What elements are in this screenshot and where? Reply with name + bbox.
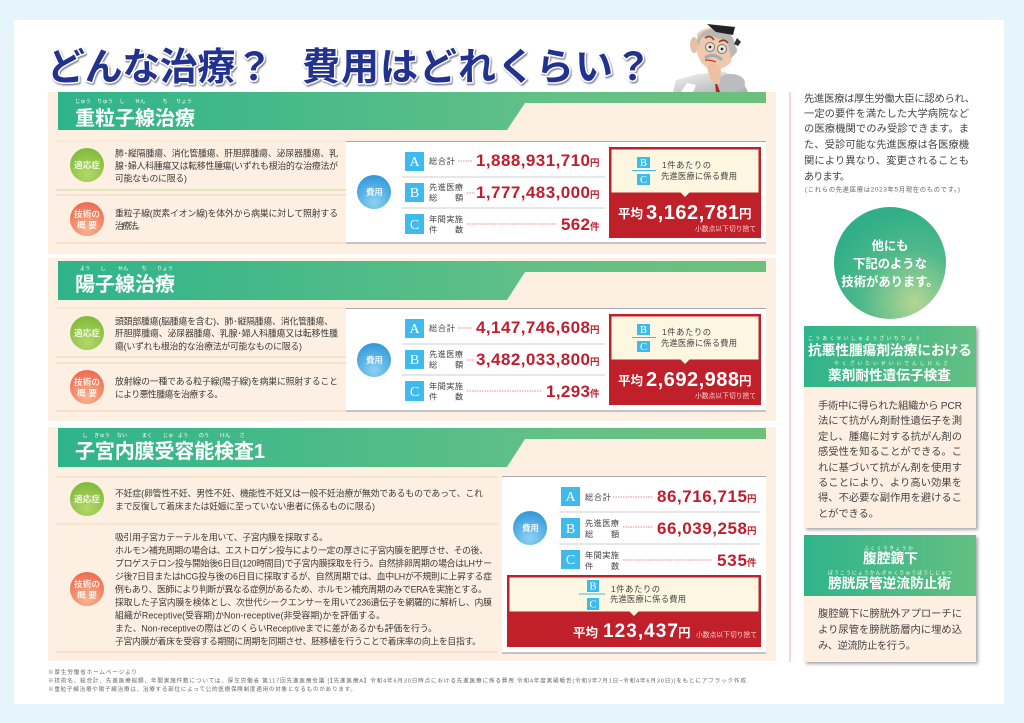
card header: ふくくうきょうか [864, 545, 913, 552]
row B amount: 総 [585, 529, 593, 539]
row C count: 年間実施 [429, 214, 463, 224]
average cost box: 円 [678, 626, 691, 640]
badge: overview: 技術の [74, 208, 100, 219]
badge: indications [70, 482, 104, 516]
average cost box: 3,162,781 [646, 202, 739, 224]
text: overview: 採取した子宮内膜を検体とし、次世代シークエンサーを用いて236遺伝子を網羅的に解析し、内膜 [115, 596, 492, 607]
section header: proton: せん [118, 265, 128, 272]
average cost box: 先進医療に係る費用 [610, 594, 686, 604]
card header: ぼうこうにょうかんぎゃくりゅうぼうしじゅつ [828, 570, 952, 576]
section header: endometrial: 子宮内膜受容能検査1 [75, 440, 265, 463]
card body text: れに基づいて抗がん剤を使用す [818, 461, 962, 474]
section header: endometrial [58, 428, 766, 467]
row B amount: 3,482,033,800 [476, 350, 590, 369]
card header: 抗悪性腫瘍剤治療における [808, 342, 972, 358]
row B amount [561, 518, 757, 539]
row B amount: 円 [590, 190, 600, 201]
row C count: 件 [429, 224, 437, 234]
section header: carbon ion: じゅう [75, 98, 91, 105]
row A total: 円 [747, 494, 757, 505]
average cost box [609, 147, 761, 238]
row A total [405, 151, 600, 171]
section header: carbon ion: りゅう [97, 98, 113, 105]
text: overview: により悪性腫瘍を治療する。 [115, 388, 223, 400]
row A total [561, 487, 757, 506]
average cost box: 1件あたりの [662, 160, 711, 170]
row C count [561, 550, 757, 571]
text: overview [115, 376, 338, 400]
average cost box: 平均 [618, 206, 643, 221]
footnotes: ※技術名、総合計、先進医療総額、年間実施件数については、厚生労働省 第117回先進医療会議 [【先進医療A】令和4年6月30日時点における先進医療に係る費用 令和4年度実績報告(令和3年7月1日~令和4年6月30日)]をもとにアフラック作成 [48, 676, 746, 684]
badge: overview [70, 370, 104, 404]
badge: overview [70, 572, 104, 606]
card header: 腹腔鏡下 [863, 550, 918, 566]
card body text: 感受性を知ることができる。こ [818, 445, 962, 458]
row C count: 数 [611, 561, 619, 571]
row A total: 4,147,746,608 [476, 318, 590, 337]
text: overview [115, 208, 338, 231]
card header [804, 326, 976, 387]
section header: endometrial: よう [178, 432, 188, 439]
text: overview: 子宮内膜が着床を受容する期間に周期を同期させ、胚移植を行うことで着床率の向上を目指す。 [115, 635, 481, 646]
section header: proton: よう [80, 265, 90, 272]
text: overview: 放射線の一種である粒子線(陽子線)を病巣に照射すること [115, 376, 338, 386]
text: indications: 不妊症(卵管性不妊、男性不妊、機能性不妊又は一般不妊治療が無効であるものであって、これ [115, 488, 483, 498]
text: advanced medicine intro: (これらの先進医療は2023年5月現在のものです。) [805, 184, 960, 194]
text: indications: 腺･婦人科腫瘍又は転移性腫瘍(いずれも根治的な治療法が [115, 160, 338, 171]
card body text: み、逆流防止を行う。 [818, 639, 916, 652]
callout: other technologies circle: 下記のような [853, 257, 927, 271]
panel: cost [346, 308, 766, 411]
row C count: C [410, 218, 419, 233]
badge: cost: 費用 [522, 522, 539, 533]
text: overview: プロゲステロン投与開始後6日目(120時間目)で子宮内膜採取を行う。自然排卵周期の場合はLHサー [115, 557, 492, 568]
text: advanced medicine intro: 一定の要件を満たした大学病院など [804, 107, 969, 120]
row C count: C [566, 553, 575, 568]
section header: endometrial: きゅう [94, 432, 110, 439]
text: overview: 重粒子線(炭素イオン線)を体外から病巣に対して照射する [115, 208, 338, 218]
row A total [405, 318, 600, 338]
row A total: A [409, 155, 420, 170]
text: indications: 肺･縦隔腫瘍、消化管腫瘍、肝胆膵腫瘍、泌尿器腫瘍、乳 [115, 148, 338, 158]
text: overview: 組織がReceptive(受容期)かNon-receptive(非受容期)かを評価する。 [115, 609, 385, 620]
badge: overview: 概 要 [77, 387, 97, 398]
average cost box: 2,692,988 [646, 369, 739, 391]
row C count: 年間実施 [585, 550, 619, 560]
row B amount: 66,039,258 [657, 519, 747, 538]
average cost box: 1件あたりの [662, 327, 711, 337]
panel: drug resistance gene test card [804, 326, 976, 528]
badge: indications: 適応症 [74, 159, 100, 170]
section header: proton: りょう [157, 265, 173, 272]
section header: carbon ion: せん [135, 98, 145, 105]
row C count: 件 [429, 392, 437, 402]
text: overview: ジ後7日目またはhCG投与後の6日目に採取するが、自然周期では、血中LHが不規則に上昇する症 [115, 570, 492, 581]
row B amount: 総 [429, 192, 437, 202]
card body text: 定し、腫瘍に対する抗がん剤の [818, 430, 962, 443]
title: 費用はどれくらい？ [302, 47, 652, 89]
card header [804, 535, 976, 596]
row B amount: B [566, 522, 575, 537]
callout: other technologies circle: 他にも [872, 238, 908, 253]
card body text: 得、不必要な副作用を避けるこ [818, 491, 962, 504]
text: advanced medicine intro: あります。 [804, 171, 850, 183]
text: overview [115, 531, 492, 646]
badge: overview: 概 要 [77, 219, 97, 230]
panel: proton carbon-ion therapy section [48, 92, 776, 254]
title: どんな治療？ [47, 47, 273, 89]
callout: other technologies circle: 技術があります。 [841, 274, 939, 289]
row C count: 件 [590, 221, 600, 233]
section header: endometrial: し [82, 432, 88, 439]
row C count [405, 381, 600, 402]
badge: overview [70, 202, 104, 236]
row A total: 円 [590, 325, 600, 336]
section header: endometrial: ない [117, 432, 127, 439]
footnotes: ※重粒子線治療や陽子線治療は、治療する部位によって公的医療保険制度適用の対象となるものがあります。 [48, 685, 356, 693]
section header: carbon ion [58, 92, 766, 130]
badge: cost [357, 343, 391, 377]
card body text: とができる。 [818, 507, 879, 520]
section header: endometrial: のう [199, 432, 209, 439]
row B amount: 先進医療 [429, 349, 463, 359]
text: indications [115, 488, 483, 512]
row A total: 総合計 [429, 156, 455, 166]
panel: cost [502, 476, 766, 653]
text: overview: 例もあり、医師により判断が異なる症例があるため、ホルモン補充周期のみでERAを実施とする。 [115, 583, 487, 594]
section header: carbon ion: し [119, 98, 125, 105]
text: indications: まで反復して着床または妊娠に至っていない患者に係るものに限る) [115, 500, 375, 512]
text: indications: 頭頚部腫瘍(脳腫瘍を含む)、肺･縦隔腫瘍、消化管腫瘍、 [115, 316, 333, 326]
card body text: ることにより、より高い効果を [818, 476, 962, 489]
text: indications: 可能なものに限る) [115, 172, 187, 184]
badge: cost: 費用 [366, 354, 383, 365]
row B amount: B [410, 186, 419, 201]
card header: 膀胱尿管逆流防止術 [828, 575, 951, 591]
section header: proton [58, 261, 766, 300]
badge: indications: 適応症 [74, 327, 100, 338]
badge: indications [70, 148, 104, 182]
average cost box: 円 [739, 207, 752, 221]
row B amount [405, 349, 600, 370]
row A total: 86,716,715 [657, 487, 747, 506]
title [47, 47, 652, 89]
average cost box: B [640, 158, 647, 169]
average cost box: B [640, 325, 647, 336]
badge: indications [70, 316, 104, 350]
average cost box: 小数点以下切り捨て [695, 224, 756, 233]
average cost box [507, 575, 761, 647]
average cost box: 小数点以下切り捨て [695, 391, 756, 400]
average cost box: C [640, 342, 647, 353]
row C count: 562 [561, 215, 590, 234]
row A total: 1,888,931,710 [476, 151, 590, 170]
row C count: 535 [717, 551, 747, 570]
row C count: 件 [590, 388, 600, 400]
row B amount: 円 [747, 526, 757, 537]
text: indications [115, 316, 338, 352]
panel: laparoscopic surgery card [804, 535, 976, 662]
text: overview: ホルモン補充周期の場合は、エストロゲン投与により一定の厚さに子宮内膜を肥厚させ、その後、 [115, 544, 488, 555]
text: overview: 吸引用子宮カテーテルを用いて、子宮内膜を採取する。 [115, 531, 328, 542]
row B amount: 額 [455, 192, 463, 202]
text: advanced medicine intro: の医療機関でのみ受診できます。ま [804, 122, 969, 135]
text: advanced medicine intro: た、受診可能な先進医療は各医療機 [804, 138, 969, 151]
text: advanced medicine intro [804, 92, 975, 194]
callout: other technologies circle [834, 207, 946, 319]
row B amount [405, 182, 600, 202]
row B amount: 総 [429, 360, 437, 370]
average cost box: B [589, 582, 597, 592]
row A total: 総合計 [585, 492, 611, 502]
text: advanced medicine intro: 先進医療は厚生労働大臣に認められ、 [804, 92, 975, 105]
card body text: 腹腔鏡下に膀胱外アプローチに [818, 607, 962, 620]
panel: proton beam section [48, 258, 776, 421]
text: advanced medicine intro: 関により異なり、変更されることも [804, 154, 969, 167]
average cost box: 小数点以下切り捨て [696, 630, 757, 639]
text: indications: 瘍(いずれも根治的な治療法が可能なものに限る) [115, 340, 302, 352]
card header: やくざいたいせいいでんしけんさ [834, 360, 948, 367]
badge: cost: 費用 [366, 186, 383, 197]
badge: cost [357, 175, 391, 209]
sidebar divider [789, 92, 791, 662]
average cost box: 平均 [618, 373, 643, 388]
average cost box: 123,437 [603, 621, 678, 642]
badge: overview: 概 要 [77, 589, 97, 600]
card body text [818, 399, 962, 520]
row A total: A [409, 322, 420, 337]
text: overview: また、Non-receptiveの際はどのくらいReceptiveまでに差があるかも評価を行う。 [115, 622, 437, 633]
row A total: 円 [590, 158, 600, 169]
row B amount: B [410, 353, 419, 368]
average cost box: 1件あたりの [611, 584, 660, 594]
section header: endometrial: けん [220, 432, 230, 439]
row B amount: 額 [455, 360, 463, 370]
badge: overview: 技術の [74, 578, 100, 589]
average cost box: C [589, 600, 597, 610]
section header: carbon ion: ち [162, 98, 168, 105]
section header: endometrial: まく [142, 432, 152, 439]
average cost box: 平均 [573, 625, 598, 640]
row B amount: 先進医療 [585, 518, 619, 528]
row C count [405, 214, 600, 234]
footnotes [48, 668, 746, 693]
section header: proton: 陽子線治療 [75, 273, 175, 296]
row C count: C [410, 385, 419, 400]
row C count: 数 [455, 224, 463, 234]
panel: cost [346, 141, 766, 243]
card body text: 手術中に得られた組織から PCR [818, 399, 962, 412]
text: indications: 肝胆膵腫瘍、泌尿器腫瘍、乳腺･婦人科腫瘍又は転移性腫 [115, 328, 338, 338]
row C count: 数 [455, 392, 463, 402]
card body text: より尿管を膀胱筋層内に埋め込 [818, 623, 962, 636]
section header: endometrial: じゅ [163, 432, 173, 439]
section header: endometrial: さ [239, 432, 245, 439]
text: overview: 治療法。 [115, 220, 145, 231]
average cost box: 先進医療に係る費用 [661, 338, 737, 348]
badge: cost [513, 511, 547, 545]
row B amount: 先進医療 [429, 182, 463, 192]
row C count: 件 [585, 561, 593, 571]
average cost box [609, 314, 761, 405]
row A total: 総合計 [429, 323, 455, 333]
row A total: A [565, 490, 576, 505]
badge: indications: 適応症 [74, 493, 100, 504]
row C count: 件 [747, 557, 757, 569]
average cost box: C [640, 175, 647, 186]
average cost box: 円 [739, 374, 752, 388]
average cost box: 先進医療に係る費用 [661, 171, 737, 181]
row B amount: 1,777,483,000 [476, 183, 590, 202]
section header: carbon ion: りょう [176, 98, 192, 105]
row B amount: 円 [590, 357, 600, 368]
card body text: 法にて抗がん剤耐性遺伝子を測 [818, 414, 962, 427]
row B amount: 額 [611, 529, 619, 539]
panel: endometrial receptivity test section [48, 427, 776, 661]
card body text [818, 607, 962, 652]
footnotes: ※厚生労働省ホームページより [48, 668, 137, 676]
card header: こうあくせいしゅようざいちりょう [808, 335, 920, 342]
row C count: 1,293 [546, 382, 590, 401]
text: indications [115, 148, 338, 184]
section header: proton: し [100, 265, 106, 272]
section header: proton: ち [141, 265, 147, 272]
badge: overview: 技術の [74, 376, 100, 387]
section header: carbon ion: 重粒子線治療 [75, 107, 195, 130]
row C count: 年間実施 [429, 381, 463, 391]
card header: 薬剤耐性遺伝子検査 [828, 367, 951, 383]
icon: professor mascot [673, 24, 748, 92]
